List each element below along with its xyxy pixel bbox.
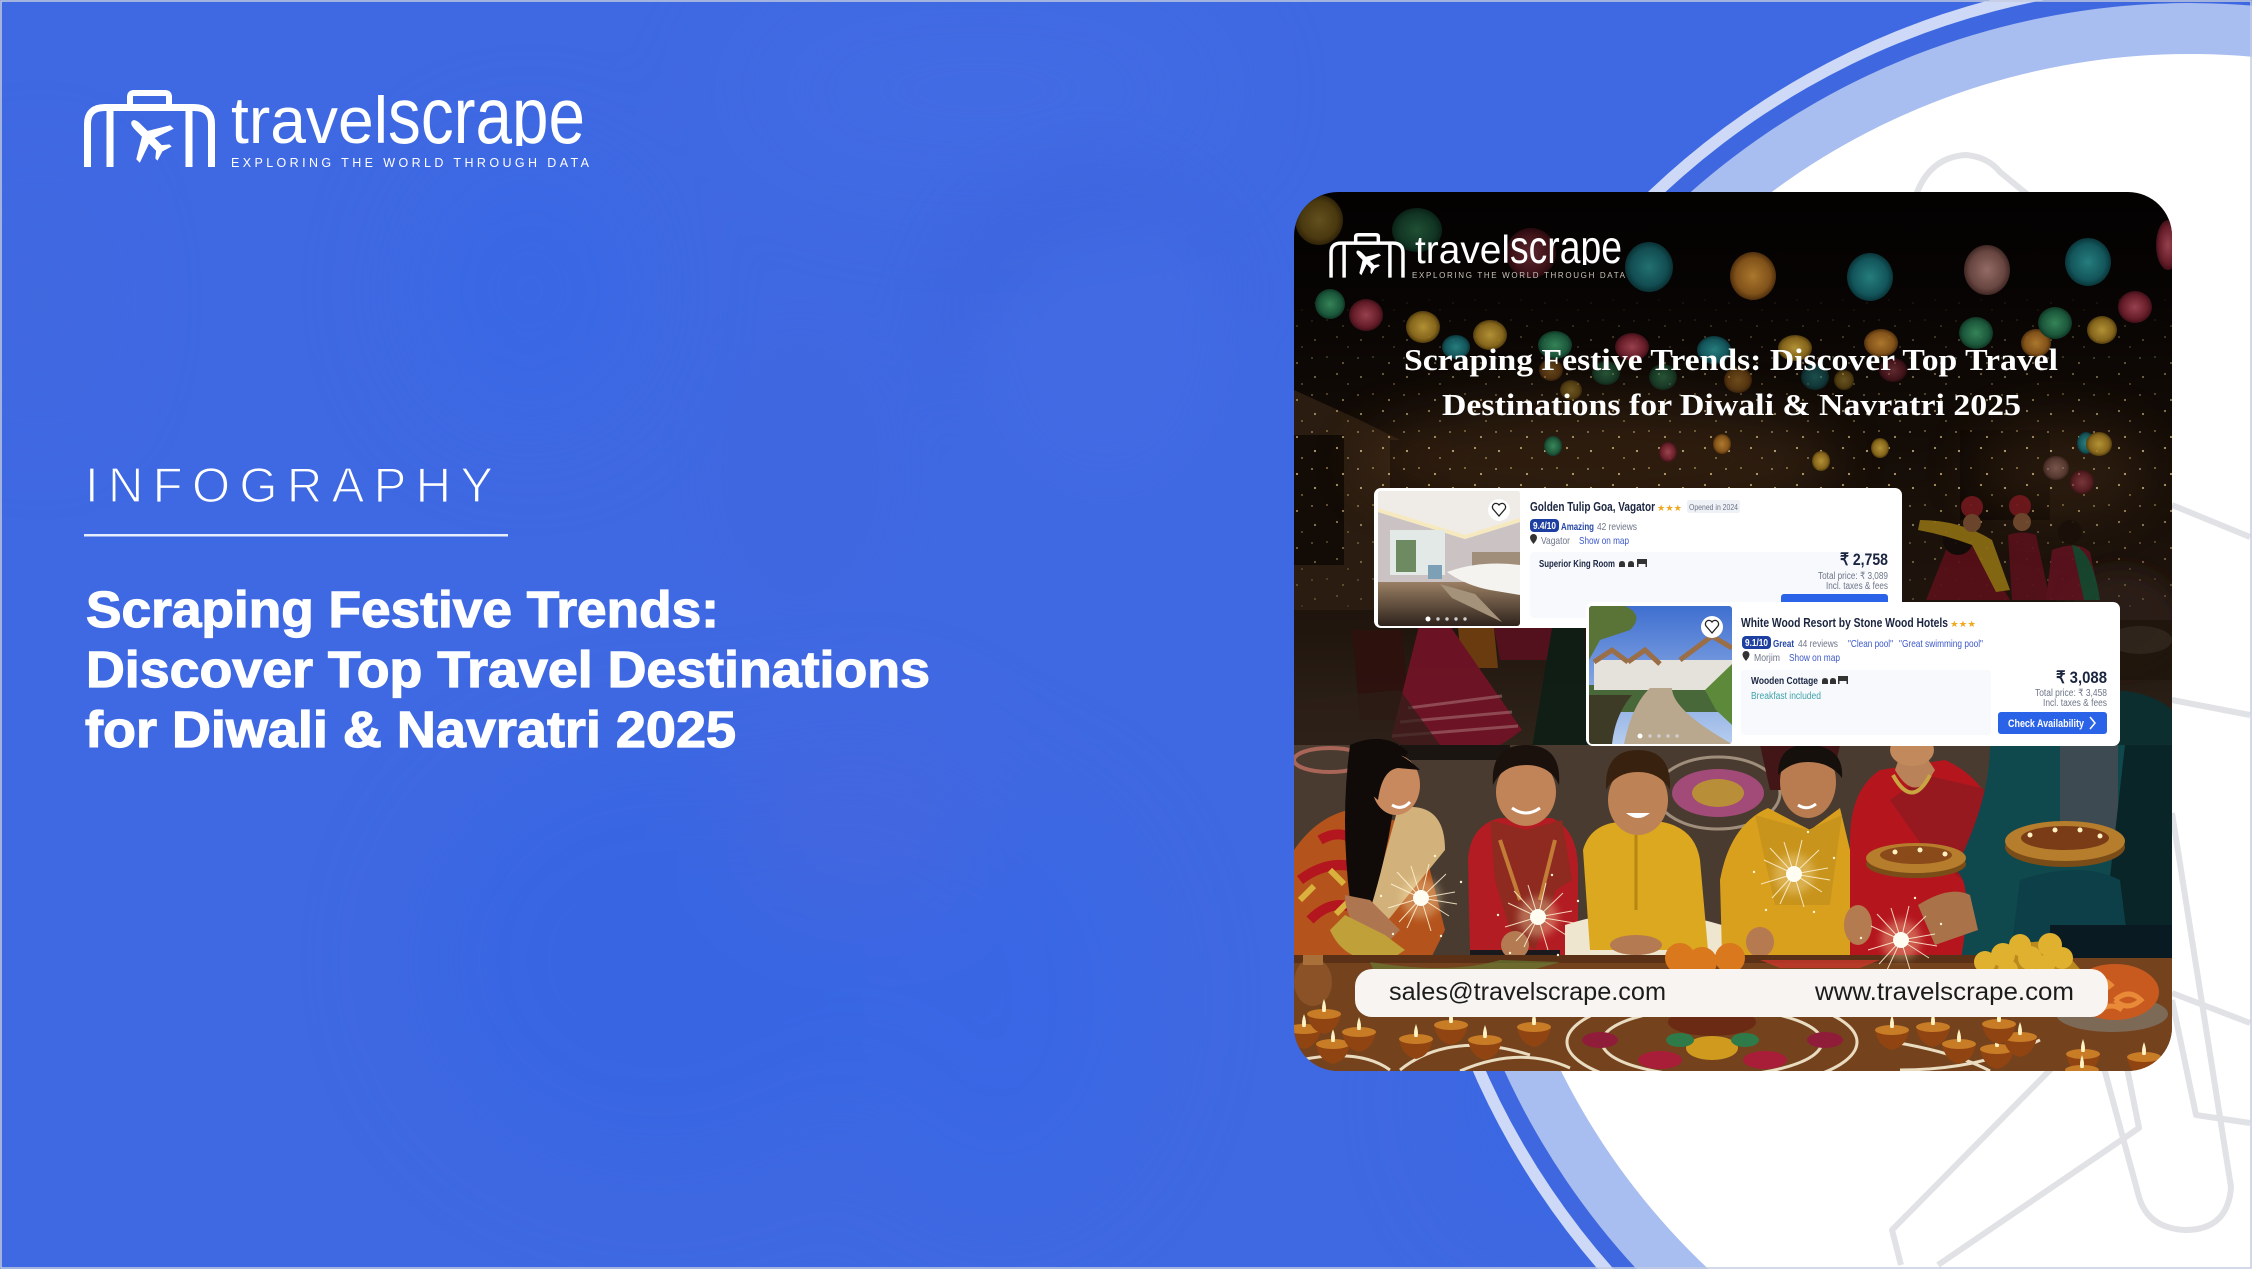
rating text: Great: [1773, 638, 1794, 650]
fairy lights: [1294, 290, 2172, 610]
meal info: Breakfast included: [1751, 691, 1821, 702]
figure: boy in red: [1468, 745, 1578, 962]
decorative arcs: concentric rings and white circle: [1407, 0, 2252, 1269]
location: Morjim: [1754, 652, 1780, 664]
room name: Wooden Cottage: [1751, 675, 1818, 687]
opened tag: [1687, 500, 1740, 513]
card title: Scraping Festive Trends: Discover Top Travel: [1404, 342, 2058, 377]
icon: card suitcase: [1331, 235, 1403, 280]
price details: Incl. taxes & fees: [1826, 581, 1888, 592]
location: [1530, 534, 1629, 547]
star rating: ★★★: [1657, 503, 1682, 513]
figure: woman in red sari: [1844, 734, 2000, 955]
price details: [1818, 571, 1888, 592]
card logo: [1331, 221, 1626, 280]
opened tag: Opened in 2024: [1689, 502, 1738, 512]
carousel dots: [1638, 734, 1679, 738]
figure: mother: [1294, 739, 1445, 961]
decorated plates: [1866, 821, 2125, 878]
divider under label: [84, 534, 508, 536]
rangoli floor: [1294, 955, 2172, 1090]
availability button: [1998, 712, 2107, 734]
logo wordmark: scrape: [388, 71, 585, 160]
hotel card: White Wood Resort: [1586, 602, 2120, 746]
background building and trees: [1294, 390, 2172, 620]
card title: [1404, 342, 2058, 422]
diyas: [1287, 999, 2161, 1090]
paper lanterns: [1295, 195, 2180, 494]
carousel dots: [1426, 616, 1467, 622]
figure: man in teal kurta: [1918, 745, 2172, 975]
logo wordmark: travel: [231, 83, 388, 157]
price details: [2035, 688, 2107, 709]
background dancers: [1352, 495, 2172, 745]
availability button: [1781, 594, 1888, 618]
star rating: ★★★: [1950, 619, 1976, 629]
headline: Discover Top Travel Destinations: [86, 641, 930, 698]
contact pill: [1355, 969, 2108, 1017]
card logo wordmark: scrape: [1510, 221, 1622, 273]
hotel photo: bedroom: [1378, 491, 1520, 626]
price details: Total price: ₹ 3,089: [1818, 571, 1888, 582]
review count and highlights: "Great swimming pool": [1899, 638, 1983, 650]
room panel: [1741, 670, 1991, 735]
card title: Destinations for Diwali & Navratri 2025: [1442, 387, 2021, 422]
hotel name: White Wood Resort by Stone Wood Hotels: [1741, 616, 1948, 630]
headline: for Diwali & Navratri 2025: [85, 701, 736, 758]
room panel: [1530, 552, 1870, 618]
card logo wordmark: travel: [1415, 229, 1510, 272]
price: ₹ 2,758: [1840, 550, 1888, 569]
icon: favourite heart: [1701, 616, 1723, 638]
headline: [85, 581, 930, 758]
website: www.travelscrape.com: [1814, 978, 2074, 1006]
marigolds and oranges: [1665, 943, 1745, 977]
location: Show on map: [1579, 535, 1629, 547]
icon: suitcase with airplane: [88, 93, 212, 171]
email: sales@travelscrape.com: [1389, 978, 1666, 1006]
hotel card: Golden Tulip Goa: [1374, 488, 1902, 628]
icon: favourite heart: [1488, 499, 1510, 521]
price details: Incl. taxes & fees: [2043, 698, 2107, 709]
logo tagline: EXPLORING THE WORLD THROUGH DATA: [231, 156, 590, 170]
rating badge: 9.1/10: [1745, 638, 1768, 649]
review count and highlights: "Clean pool": [1848, 638, 1893, 650]
location: [1742, 651, 1840, 664]
price: ₹ 3,088: [2056, 668, 2107, 687]
review count and highlights: [1798, 638, 1983, 650]
figure: boy in yellow: [1565, 750, 1722, 958]
room name: Superior King Room: [1539, 558, 1615, 570]
review count: 42 reviews: [1597, 521, 1637, 533]
location: Show on map: [1789, 652, 1840, 664]
card logo tagline: EXPLORING THE WORLD THROUGH DATA: [1412, 271, 1626, 280]
sparklers: [1380, 831, 1942, 979]
copper pot: [1294, 955, 1332, 1006]
label: INFOGRAPHY: INFOGRAPHY: [85, 459, 493, 513]
panel: festive photo card: [1287, 192, 2180, 1090]
jalebi plate: [2056, 964, 2168, 1032]
availability button: Check Availability: [2008, 718, 2085, 730]
hotel name: Golden Tulip Goa, Vagator: [1530, 500, 1655, 514]
airplane outline watermark: [1892, 155, 2250, 1265]
family scene: floor: [1294, 745, 1990, 955]
rating badge: 9.4/10: [1533, 521, 1556, 532]
photo backdrop: [1294, 192, 2172, 1071]
location: Vagator: [1541, 535, 1570, 547]
brand logo: [84, 90, 589, 167]
review count and highlights: 44 reviews: [1798, 638, 1838, 650]
hotel photo: resort: [1589, 606, 1732, 744]
headline: Scraping Festive Trends:: [86, 581, 719, 638]
figure: older boy in gold: [1720, 745, 1850, 957]
rating text: Amazing: [1561, 521, 1594, 533]
laddu sweets: [1974, 933, 2085, 980]
price details: Total price: ₹ 3,458: [2035, 688, 2107, 699]
